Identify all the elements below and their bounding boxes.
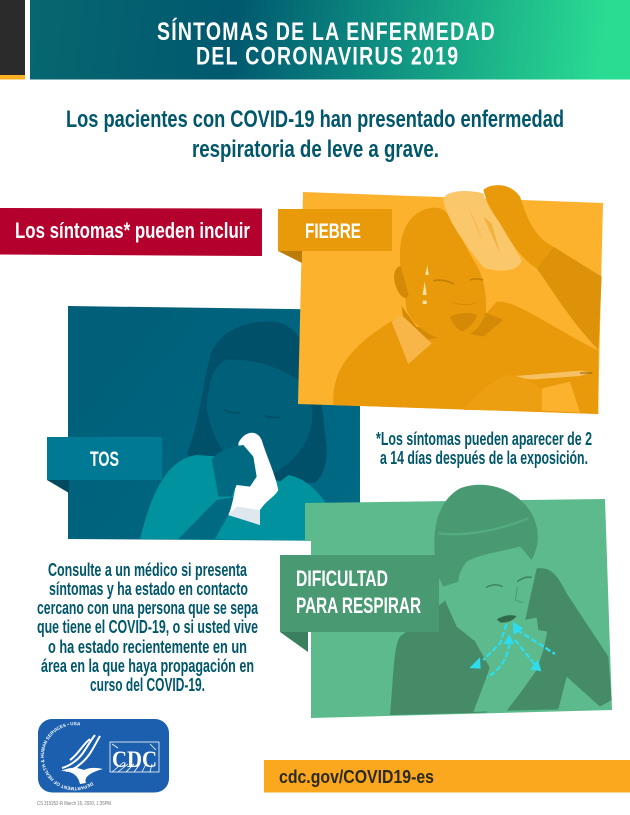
web address bar (264, 760, 630, 792)
paragraph: consulte a un médico: Consulte a un médico si presenta (48, 560, 248, 580)
subheading: respiratoria de leve a grave. (192, 136, 439, 163)
paragraph: consulte a un médico: o ha estado recientemente en un (48, 637, 247, 657)
panel: tos (47, 306, 360, 541)
header banner (30, 0, 630, 80)
panel: fiebre (278, 185, 603, 414)
header banner: SÍNTOMAS DE LA ENFERMEDAD (157, 18, 495, 46)
paragraph: consulte a un médico: curso del COVID-19. (90, 675, 205, 695)
label: dificultad para respirar (280, 555, 439, 652)
logo: HHS and CDC (38, 719, 169, 792)
label: fiebre: FIEBRE (305, 220, 361, 243)
footnote: aparición de síntomas (376, 429, 592, 468)
paragraph: consulte a un médico: área en la que haya propagación en (41, 656, 254, 676)
icon: HHS seal: DEPARTMENT OF HEALTH & HUMAN SERVICES • USA (40, 722, 94, 790)
illustration: man with fever (333, 185, 602, 414)
red banner: los síntomas pueden incluir (0, 208, 262, 256)
label: tos (47, 437, 162, 493)
web address bar: cdc.gov/COVID19-es (279, 766, 434, 787)
paragraph: consulte a un médico: cercano con una persona que se sepa (37, 598, 259, 618)
label: dificultad para respirar: DIFICULTAD (296, 566, 388, 591)
label: fiebre (278, 209, 392, 263)
icon: CDC mark: CDC (112, 747, 157, 772)
paragraph: consulte a un médico (37, 560, 259, 695)
paragraph: consulte a un médico: que tiene el COVID-19, o si usted vive (37, 617, 258, 637)
header accent block (0, 0, 25, 80)
panel: dificultad para respirar (280, 485, 612, 718)
illustration: woman coughing into tissue (140, 322, 348, 541)
header banner: DEL CORONAVIRUS 2019 (196, 42, 458, 70)
red banner: los síntomas pueden incluir: Los síntomas* pueden incluir (15, 218, 250, 243)
paragraph: consulte a un médico: síntomas y ha estado en contacto (49, 579, 248, 599)
illustration: woman short of breath (390, 485, 612, 715)
subheading (66, 106, 564, 163)
label: tos: TOS (90, 448, 119, 471)
document code: CS 315252-R March 16, 2020, 1:35PM (37, 801, 111, 807)
label: dificultad para respirar: PARA RESPIRAR (296, 593, 421, 618)
